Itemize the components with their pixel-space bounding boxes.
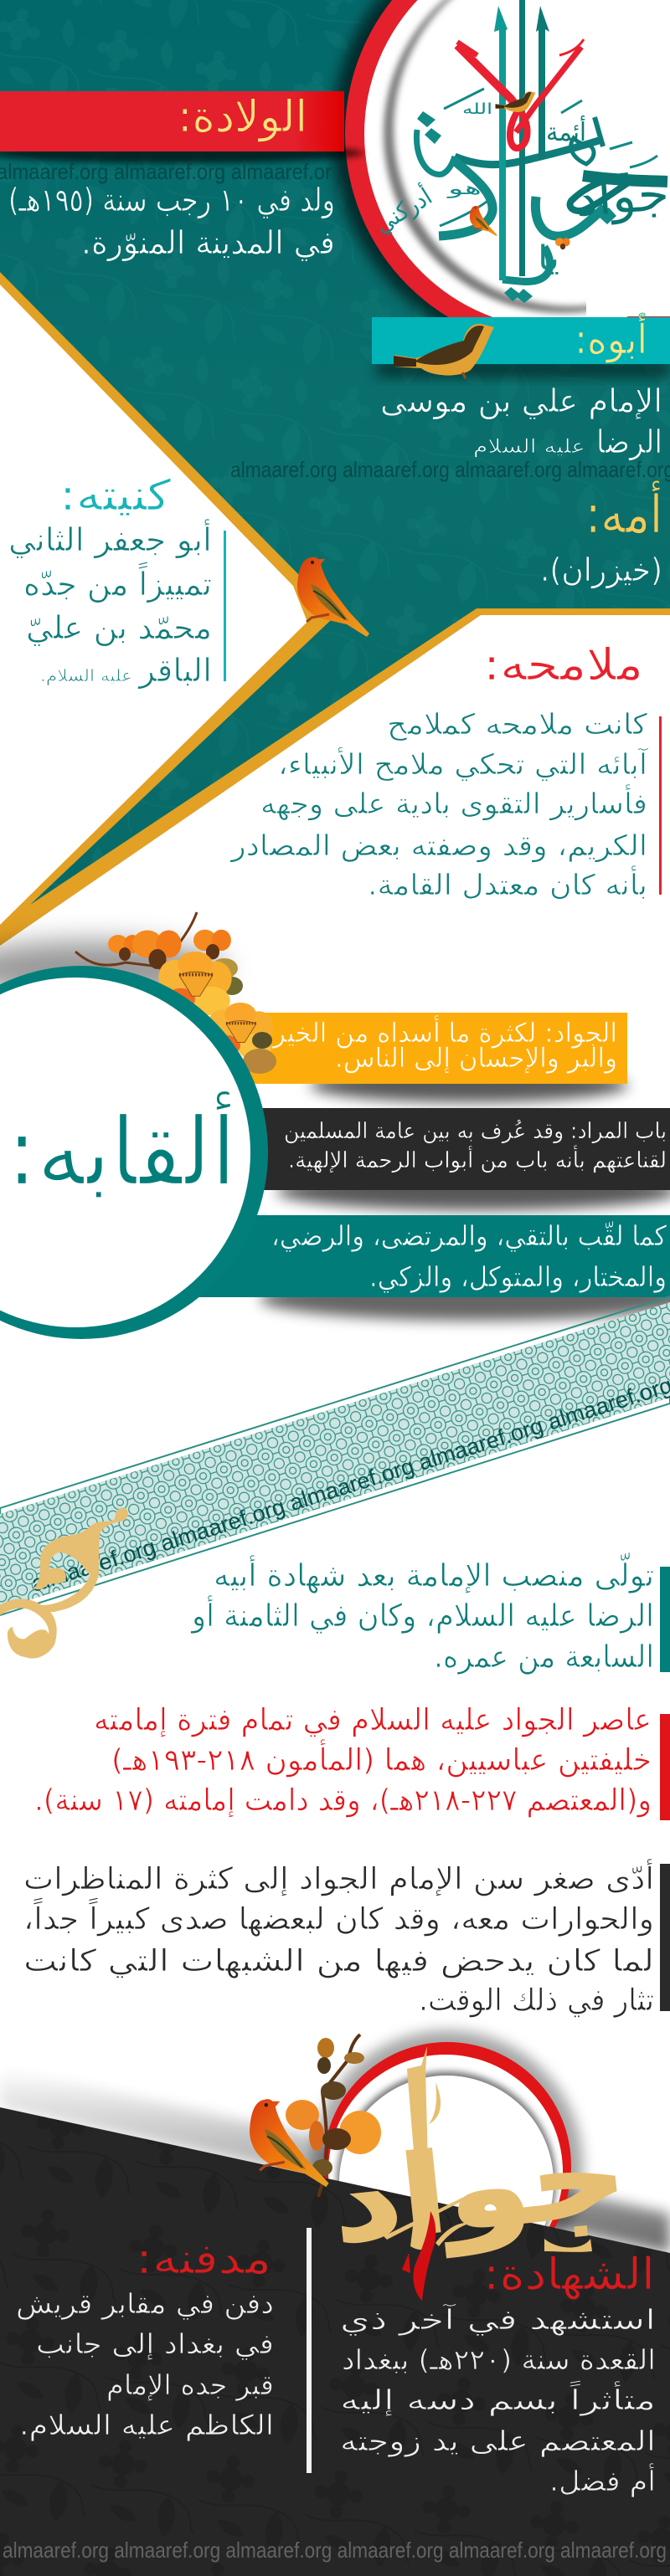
bar (660, 1567, 670, 1672)
shadow above dark panel (0, 2067, 670, 2253)
panel: features (229, 640, 662, 902)
alif stroke (407, 2046, 429, 2250)
word: adrikni: أدركني (368, 180, 437, 239)
line 5: بأنه كان معتدل القامة. (368, 865, 647, 902)
line 4: الكاظم عليه السلام. (19, 2409, 274, 2441)
dots (417, 111, 616, 303)
swash (384, 2194, 473, 2246)
small stroke (429, 2082, 441, 2124)
vertical strokes (494, 0, 549, 280)
line 3: قبر جده الإمام (106, 2368, 274, 2401)
band watermark: almaaref.org almaaref.org almaaref.org almaaref.org almaaref.org (28, 1373, 670, 1597)
bar: orange al-jawad (247, 1013, 627, 1084)
text block: debates (23, 1859, 670, 2018)
illustration: orange flowers (75, 912, 243, 1015)
heading: martyrdom: الشهادة: (483, 2250, 655, 2300)
line 3: محمّد بن عليّ (26, 609, 212, 647)
orange flowers over bar (208, 1003, 276, 1074)
heading: kunya: كنيته: (59, 471, 171, 520)
word: jawad: جواد (574, 167, 670, 228)
shadow behind titles circle (0, 941, 226, 998)
heading band: father (372, 313, 670, 377)
honorific: عليه السلام (473, 436, 585, 458)
icon: red bird on gold frame (297, 557, 369, 637)
gold ornament (0, 1508, 128, 1659)
bar: dark bab al-murad (251, 1108, 670, 1190)
lines (190, 1552, 654, 1675)
heading: father: أبوه: (575, 313, 647, 363)
shadow under bar 1 (310, 1069, 628, 1102)
titles circle (0, 966, 268, 1339)
icon: small brown bird on emblem (496, 91, 536, 113)
line 1: دفن في مقابر قريش (16, 2287, 274, 2320)
panel: kunya (8, 471, 226, 690)
line 3: متأثراً بسم دسه إليه (340, 2380, 656, 2417)
lines (34, 1703, 652, 1818)
line 2: في بغداد إلى جانب (36, 2327, 274, 2361)
line 2: تمييزاً من جدّه (23, 562, 212, 603)
shadow under bar 2 (276, 1173, 670, 1210)
heading: titles: ألقابه: (7, 1090, 236, 1207)
word: al-a'imma: أئمة (546, 115, 586, 147)
icon: brown bird on banner (394, 324, 494, 378)
top panel: gold diagonal frame (0, 271, 670, 946)
line 2: والبر والإحسان إلى الناس. (335, 1042, 617, 1074)
heading: features: ملامحه: (483, 640, 643, 690)
rule (659, 716, 662, 895)
line 1: الجواد: لكثرة ما أسداه من الخير (271, 1015, 617, 1049)
rule (224, 531, 226, 681)
line 4: المعتصم على يد زوجته (340, 2425, 656, 2457)
heading band: birth (0, 91, 364, 163)
line 1: أدّى صغر سن الإمام الجواد إلى كثرة المناظرات (23, 1859, 654, 1896)
word: ya: يا (538, 239, 559, 278)
line 2: خليفتين عباسيين، هما (المأمون ٢١٨-١٩٣هـ) (111, 1739, 652, 1778)
top panel: teal patterned background (0, 0, 670, 905)
kunya text (8, 519, 212, 690)
line 2: في المدينة المنوّرة. (81, 224, 335, 262)
features text (229, 708, 649, 902)
line 3: و(المعتصم ٢٢٧-٢١٨هـ)، وقد دامت إمامته (١٧ سنة). (34, 1783, 652, 1818)
icon: small red bird on emblem (470, 206, 497, 236)
word: jawad: جواد (326, 2111, 632, 2269)
text: mother name: (خيزران). (540, 552, 662, 589)
shadow around emblem circle (332, 0, 670, 355)
calligraphy emblem: يا جواد الأئمة أدركني (368, 0, 670, 303)
line 1: عاصر الجواد عليه السلام في تمام فترة إمامته (94, 1703, 652, 1737)
heading: birth: الولادة: (178, 92, 307, 142)
red ribbon (402, 2211, 436, 2301)
line 2: الرضا عليه السلام، وكان في الثامنة أو (190, 1595, 654, 1634)
small marks lower: هو (446, 178, 482, 198)
heading: burial: مدفنه: (136, 2235, 271, 2283)
lines (23, 1859, 654, 2018)
shadow under bar 3 (260, 1277, 670, 1321)
panel: burial (16, 2235, 274, 2441)
small marks: الله (462, 100, 492, 118)
line 1: أبو جعفر الثاني (8, 519, 212, 559)
line 4: الكريم، وقد وصفته بعض المصادر (229, 829, 647, 863)
diagonal ornamental band (0, 1296, 670, 1615)
line 2: لقناعتهم بأنه باب من أبواب الرحمة الإلهية. (288, 1144, 667, 1173)
line 1: الإمام علي بن موسى (380, 382, 662, 420)
bar (660, 1714, 670, 1820)
emblem circle (345, 0, 670, 348)
burial text (16, 2287, 274, 2441)
red ribbon in emblem (457, 39, 584, 148)
bar (660, 1864, 670, 2011)
line 4: تثار في ذلك الوقت. (419, 1983, 654, 2018)
honorific: عليه السلام. (40, 665, 132, 685)
martyrdom text (340, 2303, 656, 2497)
calligraphy: jawad (326, 2046, 632, 2269)
bottom red ring (312, 2030, 583, 2301)
icon: bird on dark panel (250, 2099, 329, 2187)
line 4: الباقر (137, 652, 212, 690)
line 1: تولّى منصب الإمامة بعد شهادة أبيه (214, 1552, 654, 1593)
line 2: القعدة سنة (٢٢٠هـ) ببغداد (342, 2343, 656, 2376)
line 3: لما كان يدحض فيها من الشبهات التي كانت (23, 1944, 654, 1978)
text block: caliphs (34, 1703, 670, 1820)
line 2: الرضا (596, 423, 662, 461)
icon: small flower on emblem (555, 238, 570, 249)
bar: teal other titles (193, 1215, 670, 1297)
flourish strokes (416, 89, 667, 282)
panel: martyrdom (340, 2250, 656, 2497)
small swash (544, 2239, 592, 2252)
illustration: flowering branch (286, 2035, 381, 2197)
line 3: السابعة من عمره. (434, 1639, 654, 1675)
bottom panel: dark patterned background (0, 2107, 670, 2576)
text block: birth (8, 182, 335, 262)
text block: imamate (190, 1552, 670, 1675)
line 1: كانت ملامحه كملامح (387, 708, 648, 741)
watermark row 1: almaaref.org almaaref.org almaaref.or (0, 159, 332, 184)
line 2: آبائه التي تحكي ملامح الأنبياء، (278, 747, 649, 782)
line 2: والحوارات معه، وقد كان لبعضها صدى كبيراً جداً، (23, 1897, 654, 1937)
line 1: ولد في ١٠ رجب سنة (١٩٥هـ) (8, 182, 335, 219)
line 5: أم فضل. (549, 2463, 656, 2497)
line 3: فأسارير التقوى بادية على وجهه (260, 784, 647, 821)
divider (307, 2228, 312, 2473)
text block: father (380, 382, 662, 461)
line 1: استشهد في آخر ذي (340, 2303, 656, 2336)
